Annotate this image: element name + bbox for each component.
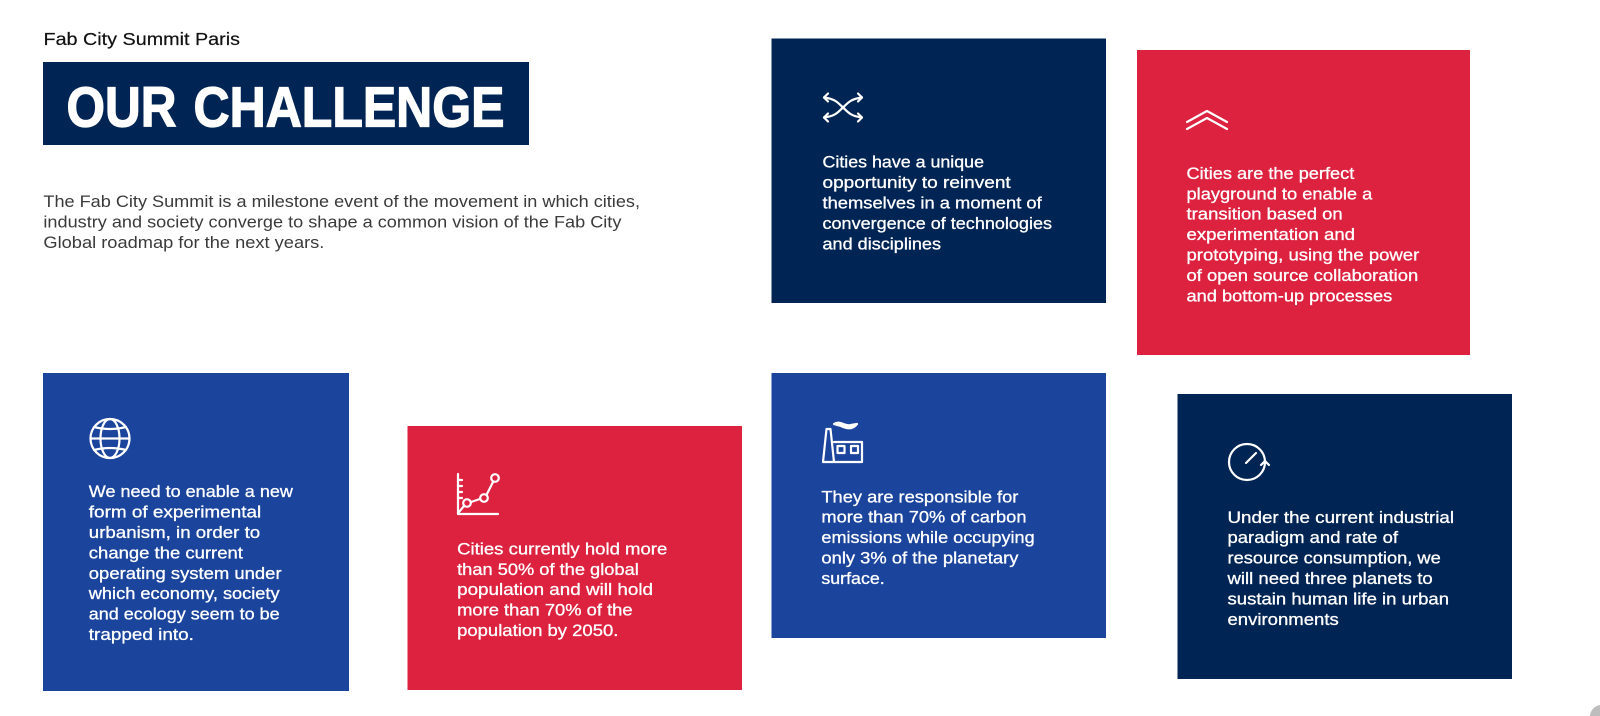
text: planets: resource consumption, we xyxy=(1228,550,1441,568)
text: planets: sustain human life in urban xyxy=(1228,590,1449,608)
text: emissions: more than 70% of carbon xyxy=(821,509,1026,527)
panel: global population xyxy=(408,426,742,690)
text: cities opportunity: themselves in a moment of xyxy=(822,194,1042,212)
text: urbanism: urbanism, in order to xyxy=(89,524,260,542)
text: urbanism: and ecology seem to be xyxy=(89,606,280,624)
text: planets: will need three planets to xyxy=(1226,570,1433,588)
icon: dial with arrow xyxy=(1229,444,1269,480)
text: emissions: They are responsible for xyxy=(821,488,1019,506)
text: urbanism: which economy, society xyxy=(88,585,280,603)
text: urbanism: We need to enable a new xyxy=(89,483,293,501)
text: playground: transition based on xyxy=(1186,206,1343,224)
icon: globe xyxy=(90,419,130,458)
text: cities opportunity: convergence of technologies xyxy=(822,215,1052,233)
icon: crossing arrows xyxy=(824,94,862,122)
text: cities opportunity xyxy=(822,154,1052,253)
intro text block: The Fab City Summit is a milestone event of the movement in which cities, xyxy=(43,193,640,211)
text: cities opportunity: opportunity to reinvent xyxy=(822,174,1011,192)
text: planets: paradigm and rate of xyxy=(1228,529,1398,547)
icon: double chevron xyxy=(1187,111,1227,129)
intro text block: Global roadmap for the next years. xyxy=(43,234,324,252)
text: emissions: emissions while occupying xyxy=(821,529,1035,547)
text: population: population and will hold xyxy=(457,581,653,599)
text: playground xyxy=(1186,165,1420,305)
title banner: OUR xyxy=(66,76,176,140)
panel: perfect playground xyxy=(1137,50,1470,355)
panel: reinvent opportunity xyxy=(772,38,1106,303)
text: playground: playground to enable a xyxy=(1186,185,1373,203)
text: planets: Under the current industrial xyxy=(1228,509,1454,527)
title banner: CHALLENGE xyxy=(194,76,504,140)
panel: experimental urbanism xyxy=(43,373,349,691)
intro text block xyxy=(43,193,640,252)
panel: carbon emissions xyxy=(772,373,1106,638)
text: emissions: surface. xyxy=(821,570,885,588)
text: population: Cities currently hold more xyxy=(457,540,667,558)
intro text block: industry and society converge to shape a common vision of the Fab City xyxy=(43,214,622,232)
panel: three planets xyxy=(1178,394,1512,679)
text: emissions xyxy=(821,488,1035,588)
text: urbanism: operating system under xyxy=(89,565,282,583)
text: cities opportunity: and disciplines xyxy=(822,235,941,253)
text: urbanism: trapped into. xyxy=(89,626,194,644)
text: playground: of open source collaboration xyxy=(1186,267,1418,285)
text: population xyxy=(457,540,667,640)
text: population: population by 2050. xyxy=(457,622,618,640)
heading: event name: Fab City Summit Paris xyxy=(44,29,240,49)
icon: line chart xyxy=(458,474,499,514)
text: urbanism: form of experimental xyxy=(89,504,261,522)
text: urbanism xyxy=(88,483,293,644)
text: population: more than 70% of the xyxy=(457,602,633,620)
text: playground: Cities are the perfect xyxy=(1186,165,1355,183)
text: planets xyxy=(1226,509,1454,629)
text: cities opportunity: Cities have a unique xyxy=(822,154,984,172)
text: playground: prototyping, using the power xyxy=(1186,246,1420,264)
title banner xyxy=(43,62,529,145)
text: emissions: only 3% of the planetary xyxy=(821,550,1019,568)
text: population: than 50% of the global xyxy=(457,561,639,579)
text: playground: and bottom-up processes xyxy=(1186,287,1392,305)
text: planets: environments xyxy=(1228,611,1339,629)
corner grey circle xyxy=(1590,705,1600,716)
text: urbanism: change the current xyxy=(89,544,243,562)
icon: factory xyxy=(823,423,862,462)
text: playground: experimentation and xyxy=(1186,226,1355,244)
